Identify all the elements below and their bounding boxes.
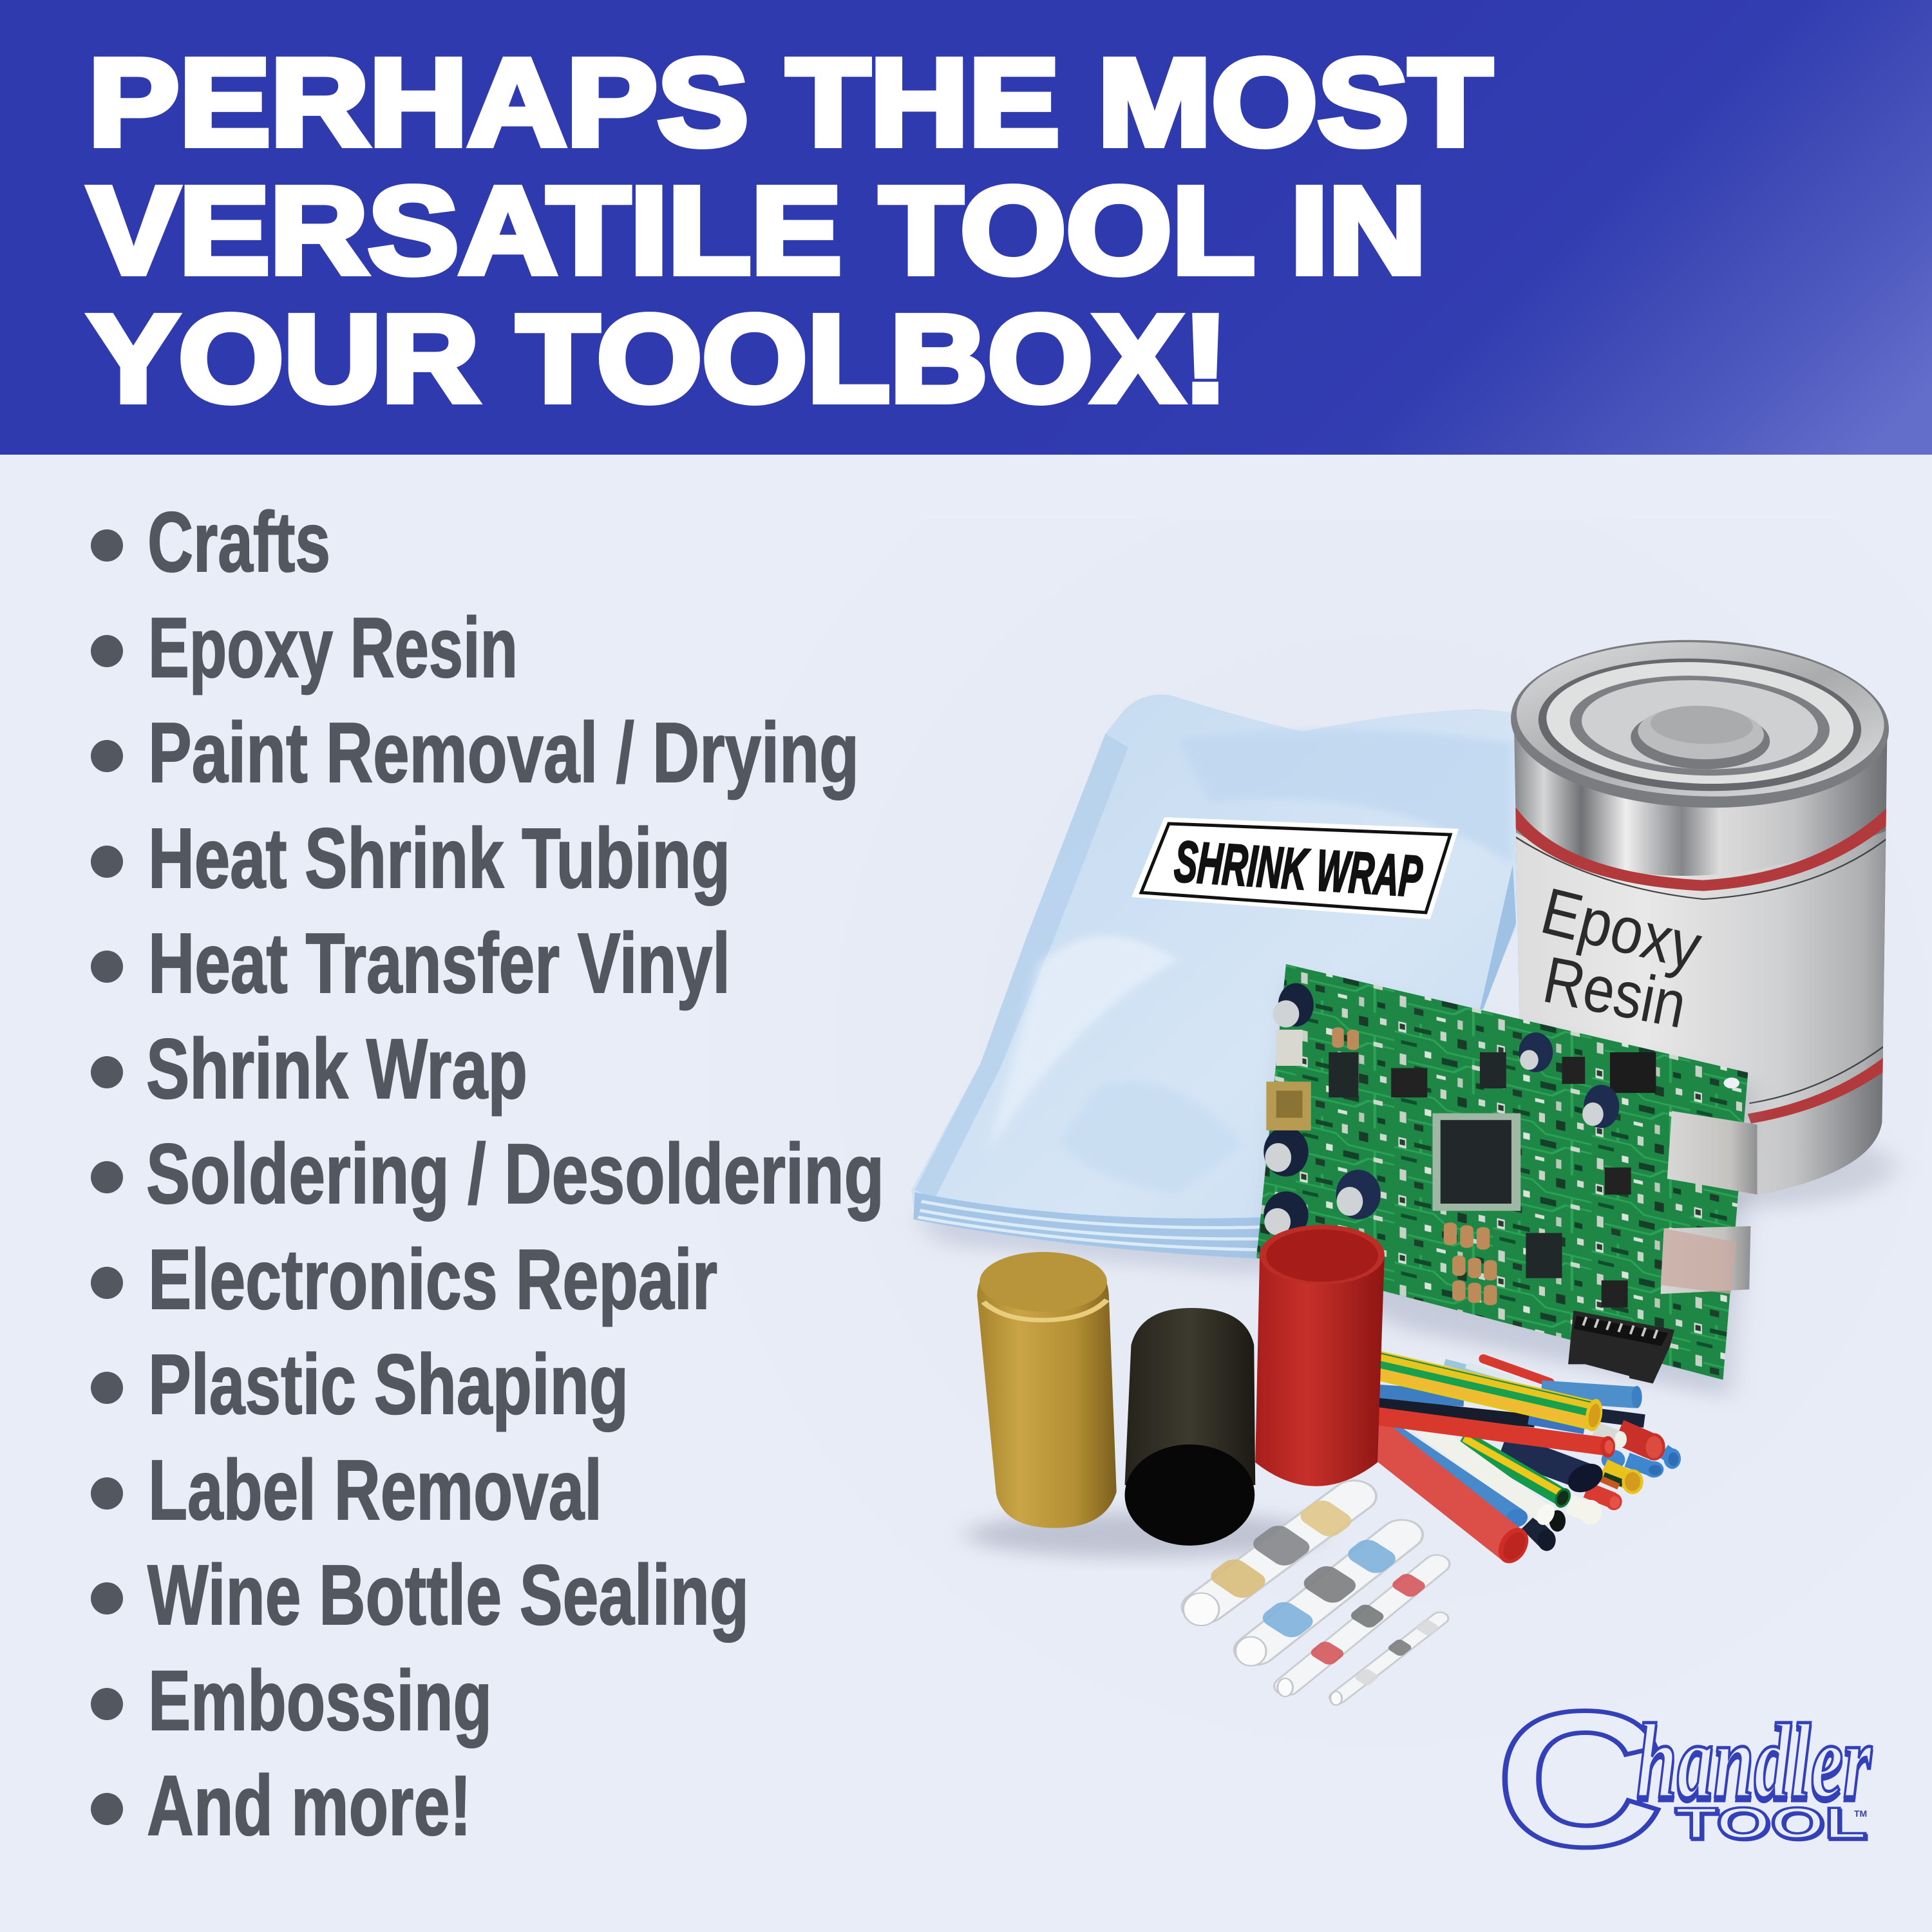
shrink wrap bag — [911, 694, 1522, 1276]
list item: Heat Transfer Vinyl: Heat Transfer Vinyl — [148, 916, 730, 1010]
can label text: Resin — [1538, 943, 1692, 1042]
logo script wordmark: C — [1495, 1671, 1664, 1887]
black header connector — [1568, 1311, 1674, 1383]
main processor chip — [1432, 1113, 1520, 1211]
photo backdrop — [708, 519, 1932, 1771]
black socket — [1610, 1052, 1656, 1093]
list item: Crafts: Crafts — [147, 495, 330, 589]
solder seal connectors — [1183, 1497, 1440, 1705]
USB ports — [1661, 1111, 1757, 1294]
logo script wordmark — [1495, 1671, 1872, 1887]
can lid — [1502, 631, 1897, 817]
list item: Epoxy Resin: Epoxy Resin — [148, 600, 518, 695]
mounting hole — [1724, 1077, 1739, 1088]
shrink wrap label — [1132, 817, 1459, 919]
heat shrink tubing bundle — [1372, 1352, 1681, 1569]
list item: Shrink Wrap: Shrink Wrap — [146, 1021, 527, 1116]
small items group — [965, 1225, 1440, 1705]
title — [88, 33, 1492, 428]
list item: Label Removal: Label Removal — [148, 1443, 602, 1537]
header banner — [0, 0, 1932, 455]
list item: Wine Bottle Sealing: Wine Bottle Sealing — [147, 1548, 749, 1642]
circuit board — [1256, 964, 1757, 1398]
list item: Embossing: Embossing — [148, 1653, 492, 1748]
title: PERHAPS THE MOST — [88, 33, 1492, 171]
list item: Plastic Shaping — [91, 1337, 629, 1432]
side connectors — [1276, 1030, 1302, 1066]
list item: Shrink Wrap — [91, 1021, 527, 1116]
list item: And more! — [91, 1758, 471, 1853]
shadows — [965, 1512, 1322, 1557]
resistor array — [1332, 1027, 1497, 1305]
list of uses — [91, 495, 884, 1853]
red capsule — [1255, 1225, 1385, 1486]
list item: Embossing — [91, 1653, 492, 1748]
list item: Label Removal — [91, 1443, 602, 1537]
connector end caps — [1183, 1593, 1342, 1705]
epoxy resin can — [1502, 631, 1897, 1208]
logo TOOL wordmark: TOOL — [1675, 1799, 1867, 1848]
trademark: TM — [1854, 1808, 1867, 1819]
list item: And more!: And more! — [147, 1758, 471, 1853]
small chips — [1329, 1052, 1358, 1097]
list item: Paint Removal / Drying: Paint Removal / Drying — [148, 705, 859, 800]
Chandler Tool logo — [1495, 1671, 1872, 1887]
connector bands — [1206, 1497, 1440, 1687]
list item: Crafts — [91, 495, 330, 589]
list item: Soldering / Desoldering: Soldering / Desoldering — [146, 1126, 884, 1221]
shrink wrap label: SHRINK WRAP — [1173, 829, 1425, 909]
black capsule — [1125, 1308, 1255, 1546]
title: YOUR TOOLBOX! — [88, 289, 1228, 428]
can label text: Epoxy — [1535, 874, 1709, 984]
list item: Epoxy Resin — [91, 600, 518, 695]
gold capsule — [977, 1252, 1117, 1528]
capacitors — [1264, 983, 1619, 1238]
can label text — [1535, 874, 1709, 1042]
list item: Electronics Repair: Electronics Repair — [148, 1232, 717, 1327]
title: VERSATILE TOOL IN — [88, 161, 1426, 299]
list item: Plastic Shaping: Plastic Shaping — [148, 1337, 629, 1432]
red stripes — [1510, 811, 1894, 886]
list item: Heat Shrink Tubing: Heat Shrink Tubing — [148, 811, 730, 905]
